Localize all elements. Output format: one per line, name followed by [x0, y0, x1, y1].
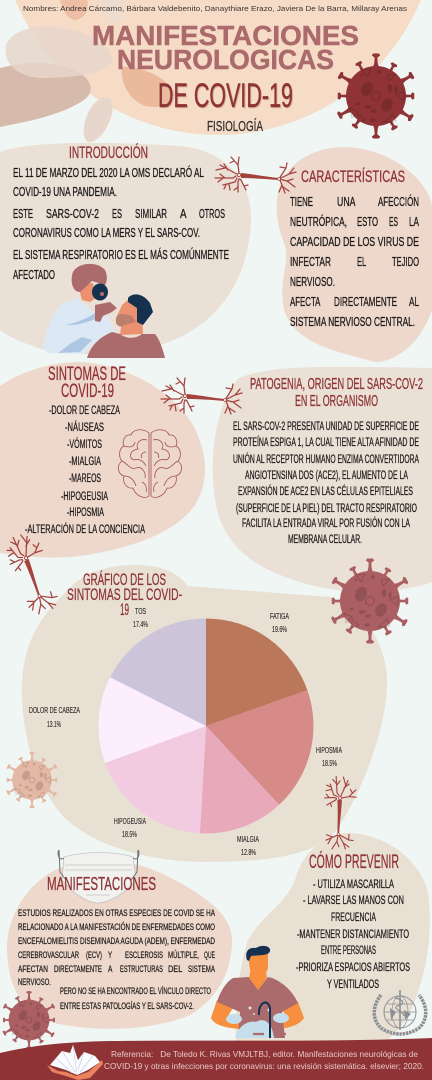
- title: [92, 20, 359, 116]
- head: [248, 953, 268, 976]
- patient neck and face: [117, 298, 143, 335]
- text: manifestaciones: SISTEMA: [188, 964, 215, 975]
- text: manifestaciones: (ECV): [86, 950, 102, 961]
- text: características: EL: [357, 255, 366, 269]
- book pages: [50, 1045, 100, 1075]
- heading: gráfico: [67, 570, 182, 619]
- right arm: [276, 1002, 304, 1029]
- pie labels: FATIGA: [270, 612, 289, 621]
- text: características: UNA: [337, 195, 356, 209]
- pie labels: TOS: [135, 607, 146, 616]
- decorative blob: dark tan: [0, 63, 91, 127]
- doctor cap: [72, 264, 107, 292]
- icon: face mask: [58, 850, 139, 903]
- icon: virus top right: [336, 54, 415, 138]
- text: características: [290, 194, 419, 329]
- text: características: TIENE: [290, 195, 313, 209]
- shirt: [217, 977, 298, 1038]
- text: manifestaciones: ENCEFALOMIELITIS DISEMINADA AGUDA (ADEM), ENFERMEDAD: [18, 936, 215, 947]
- footer band: [0, 1038, 432, 1080]
- text: características: ES: [389, 215, 398, 229]
- text: introducción: AFECTADO: [13, 268, 55, 282]
- title: NEUROLOGICAS: [117, 44, 334, 75]
- heading: síntomas: [48, 364, 126, 402]
- header peach circle: [0, 0, 432, 135]
- text: manifestaciones: ENTRE ESTAS PATOLOGÍAS Y EL SARS-COV-2.: [60, 1001, 194, 1012]
- text: características: AFECTA: [290, 295, 321, 309]
- icon: virus pale: [6, 752, 58, 808]
- hair: [246, 946, 270, 961]
- text: características: AL: [409, 295, 419, 309]
- text: manifestaciones: CEREBROVASCULAR: [18, 950, 79, 961]
- text: introducción: ES: [112, 207, 122, 221]
- patient shirt: [87, 332, 165, 358]
- heading: síntomas: SINTOMAS DE: [48, 364, 126, 385]
- text: características: LA: [409, 215, 419, 229]
- text: introducción: COVID-19 UNA PANDEMIA.: [13, 185, 117, 199]
- icon: virus chart: [330, 558, 409, 644]
- list: síntomas: -MIALGIA: [69, 456, 101, 468]
- text: introducción: A: [180, 207, 187, 221]
- icon: neuron 4: [323, 776, 359, 850]
- pie chart: [99, 618, 313, 833]
- text: introducción: CORONAVIRUS COMO LA MERS Y EL SARS-COV.: [13, 226, 200, 240]
- patient hair: [128, 294, 153, 325]
- list: cómo prevenir: Y VENTILADOS: [327, 979, 379, 991]
- icon: brain: [118, 430, 182, 497]
- left arm: [211, 1000, 242, 1029]
- heading: patogenia: [250, 376, 423, 410]
- pie labels: 19.6%: [272, 625, 287, 634]
- illustration: doctor testing patient: [43, 264, 165, 358]
- text: manifestaciones: NERVIOSO.: [18, 977, 51, 988]
- list: síntomas: -DOLOR DE CABEZA: [49, 405, 120, 417]
- neck: [249, 972, 267, 990]
- panel: gráfico: [22, 565, 387, 862]
- text: características: INFECTAR: [290, 255, 331, 269]
- text: manifestaciones: ESCLEROSIS: [125, 950, 163, 961]
- list: síntomas: -VÓMITOS: [67, 438, 102, 451]
- text: manifestaciones: Y: [108, 950, 112, 961]
- panel: síntomas: [0, 362, 205, 558]
- patient mask: [116, 314, 136, 326]
- decorative blob: top orange: [60, 0, 88, 20]
- illustration: hand washing: [211, 946, 304, 1038]
- pie labels: 12.8%: [241, 848, 256, 857]
- panel: cómo prevenir: [236, 833, 430, 1045]
- list: síntomas: -HIPOGEUSIA: [61, 491, 108, 503]
- text: introducción: ESTE: [13, 207, 33, 221]
- foam: [235, 1020, 274, 1038]
- sink handles: [253, 1033, 286, 1035]
- list: cómo prevenir: FRECUENCIA: [331, 912, 376, 924]
- text: manifestaciones: A: [108, 964, 113, 975]
- text: introducción: OTROS: [199, 207, 225, 221]
- panel: introducción: [0, 143, 251, 354]
- text: características: NEUTRÓPICA,: [290, 214, 347, 229]
- list: cómo prevenir: ENTRE PERSONAS: [321, 945, 376, 957]
- text: características: ESTO: [357, 215, 378, 229]
- icon: neuron 3: [0, 529, 66, 617]
- doctor mask: [92, 284, 108, 300]
- text: introducción: EL 11 DE MARZO DEL 2020 LA OMS DECLARÓ AL: [13, 165, 204, 180]
- panel: manifestaciones: [7, 850, 232, 1029]
- icon: neuron 2: [161, 378, 242, 414]
- doctor glove: [95, 302, 117, 322]
- decorative blob: orange: [122, 67, 175, 107]
- panel: patogenia: [213, 367, 432, 592]
- pie labels: 18.5%: [122, 830, 137, 839]
- book cover: [47, 1060, 103, 1080]
- icon: neuron 1: [215, 157, 296, 193]
- text: manifestaciones: MÚLTIPLE,: [168, 950, 199, 961]
- text: características: NERVIOSO.: [290, 275, 335, 289]
- pie labels: 13.1%: [47, 720, 61, 729]
- reference text: COVID-19 y otras infecciones por coronavirus: una revisión sistemática. elsevier; 2020.: [104, 1061, 424, 1071]
- heading: manifestaciones: MANIFESTACIONES: [47, 874, 156, 894]
- text: introducción: SIMILAR: [135, 207, 167, 221]
- pie labels: HIPOGEUSIA: [114, 817, 146, 826]
- reference text: [104, 1049, 424, 1071]
- decorative blob: top light: [98, 0, 125, 23]
- decorative blob: small light: [84, 97, 113, 142]
- doctor face: [78, 283, 96, 302]
- list: síntomas: -ALTERACIÓN DE LA CONCIENCIA: [25, 523, 145, 536]
- heading: síntomas: COVID-19: [61, 381, 114, 402]
- text: introducción: SARS-COV-2: [46, 207, 99, 221]
- pie labels: 17.4%: [133, 620, 148, 629]
- heading: gráfico: SINTOMAS DEL COVID-: [67, 585, 182, 604]
- text: características: DIRECTAMENTE: [334, 295, 397, 309]
- text: manifestaciones: PERO NO SE HA ENCONTRADO EL VÍNCULO DIRECTO: [60, 986, 211, 997]
- text: manifestaciones: AFECTAN: [18, 964, 48, 975]
- pie labels: 18.5%: [322, 759, 337, 768]
- text: manifestaciones: ESTRUCTURAS: [120, 964, 163, 975]
- panel: características: [277, 147, 432, 362]
- text: manifestaciones: [18, 908, 215, 1012]
- text: introducción: [13, 165, 229, 282]
- reference text: Referencia: De Toledo K. Rivas VMJLTBJ, editor. Manifestaciones neurológicas de: [111, 1049, 418, 1059]
- list: síntomas: [25, 405, 145, 536]
- icon: virus bottom left: [2, 991, 56, 1049]
- text: manifestaciones: DEL: [168, 964, 183, 975]
- text: patogenia: MEMBRANA CELULAR.: [288, 534, 362, 546]
- text: introducción: EL SISTEMA RESPIRATORIO ES EL MÁS COMÚNMENTE: [13, 247, 229, 262]
- list: síntomas: -MAREOS: [69, 473, 101, 485]
- text: manifestaciones: RELACIONADO A LA MANIFESTACIÓN DE ENFERMEDADES COMO: [18, 922, 215, 933]
- authors line: Nombres: Andrea Cárcamo, Bárbara Valdebenito, Danaythiare Erazo, Javiera De la Barra, Millaray Arenas: [23, 4, 407, 13]
- text: manifestaciones: ESTUDIOS REALIZADOS EN OTRAS ESPECIES DE COVID SE HA: [18, 908, 215, 919]
- subtitle: FISIOLOGÍA: [207, 118, 263, 135]
- text: patogenia: [233, 421, 419, 546]
- text: manifestaciones: DIRECTAMENTE: [54, 964, 102, 975]
- pie labels: HIPOSMIA: [316, 746, 342, 755]
- heading: introducción: INTRODUCCIÓN: [69, 143, 148, 162]
- pie labels: [29, 607, 342, 857]
- heading: gráfico: GRÁFICO DE LOS: [83, 570, 166, 589]
- icon: open book: [47, 1045, 103, 1080]
- pie labels: MIALGIA: [237, 835, 259, 844]
- heading: gráfico: 19: [120, 600, 129, 619]
- title: DE COVID-19: [159, 78, 294, 116]
- decorative blob: light translucent: [6, 26, 112, 78]
- title: MANIFESTACIONES: [92, 20, 359, 51]
- doctor suit: [43, 298, 115, 354]
- text: manifestaciones: QUE: [204, 950, 215, 961]
- faucet: [259, 1003, 270, 1038]
- icon: WHO emblem: [374, 990, 426, 1034]
- list: síntomas: -NÁUSEAS: [65, 421, 104, 434]
- pie labels: DOLOR DE CABEZA: [29, 706, 80, 715]
- list: síntomas: -HIPOSMIA: [67, 507, 104, 519]
- list: cómo prevenir: [296, 879, 410, 991]
- title: DE COVID-19: [158, 77, 293, 115]
